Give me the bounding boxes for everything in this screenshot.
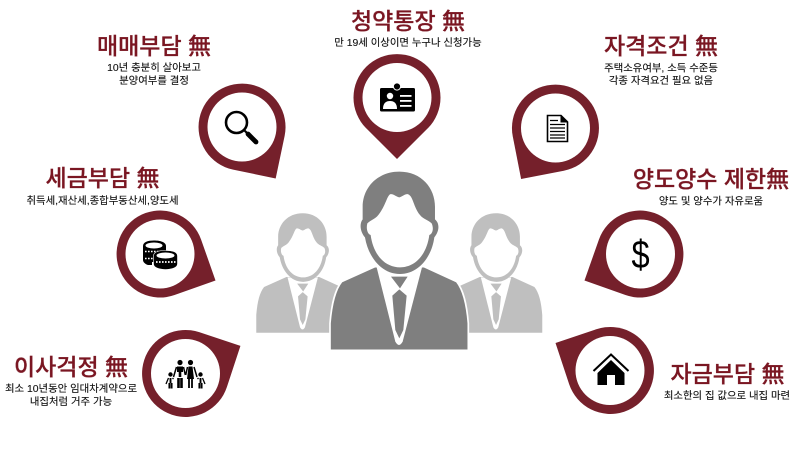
panel: 매매부담 bbox=[97, 33, 312, 202]
pin: family bbox=[127, 307, 260, 432]
icon: house bbox=[594, 354, 628, 385]
panel: 자금부담 bbox=[536, 304, 790, 429]
heading: 이사걱정: 이사걱정 無 bbox=[14, 354, 128, 380]
panel: 세금부담 bbox=[26, 165, 234, 320]
heading: 자금부담: 자금부담 無 bbox=[670, 361, 785, 387]
panel: 이사걱정 bbox=[5, 307, 260, 432]
pin: house bbox=[536, 304, 669, 429]
text: 자격조건 description: 주택소유여부, 소득 수준등 bbox=[604, 62, 718, 74]
text: 자격조건 description: 각종 자격요건 필요 없음 bbox=[609, 74, 713, 87]
text: 양도양수 description: 양도 및 양수가 자유로움 bbox=[659, 196, 763, 208]
text: 매매부담 description: 분양여부를 결정 bbox=[119, 75, 189, 87]
heading: 자격조건: 자격조건 無 bbox=[604, 33, 718, 59]
heading: 세금부담: 세금부담 無 bbox=[45, 165, 160, 191]
heading: 매매부담: 매매부담 無 bbox=[97, 33, 211, 59]
text: 매매부담 description bbox=[107, 62, 201, 87]
pin: id card bbox=[354, 54, 440, 159]
text: 매매부담 description: 10년 충분히 살아보고 bbox=[107, 62, 201, 74]
icon: document bbox=[548, 116, 568, 142]
panel: 양도양수 제한 bbox=[566, 166, 789, 320]
pin: document bbox=[485, 68, 616, 203]
icon: dollar sign: $ bbox=[631, 232, 650, 277]
text: 세금부담 description: 취득세,재산세,종합부동산세,양도세 bbox=[26, 195, 179, 207]
text: 이사걱정 description: 내집처럼 거주 가능 bbox=[30, 395, 113, 408]
text: 자금부담 description: 최소한의 집 값으로 내집 마련 bbox=[664, 390, 790, 402]
pin: magnifier bbox=[182, 67, 312, 202]
panel: 청약통장 bbox=[334, 8, 482, 159]
text: 청약통장 description: 만 19세 이상이면 누구나 신청가능 bbox=[334, 37, 482, 49]
icon: coins bbox=[143, 240, 178, 270]
text: 자격조건 description bbox=[604, 62, 718, 87]
panel: 자격조건 bbox=[485, 33, 718, 203]
text: 이사걱정 description bbox=[5, 382, 137, 408]
pin: coins bbox=[102, 196, 234, 320]
heading: 양도양수 제한: 양도양수 제한無 bbox=[633, 166, 789, 192]
icon: id card bbox=[380, 83, 415, 112]
icon: family bbox=[166, 360, 205, 388]
text: 이사걱정 description: 최소 10년동안 임대차계약으로 bbox=[5, 382, 137, 395]
person: right background figure bbox=[450, 213, 542, 333]
person: central foreground figure bbox=[330, 172, 468, 350]
heading: 청약통장: 청약통장 無 bbox=[351, 8, 465, 34]
person: left background figure bbox=[256, 213, 349, 333]
pin: dollar bbox=[566, 196, 698, 320]
icon: magnifier bbox=[226, 112, 256, 142]
